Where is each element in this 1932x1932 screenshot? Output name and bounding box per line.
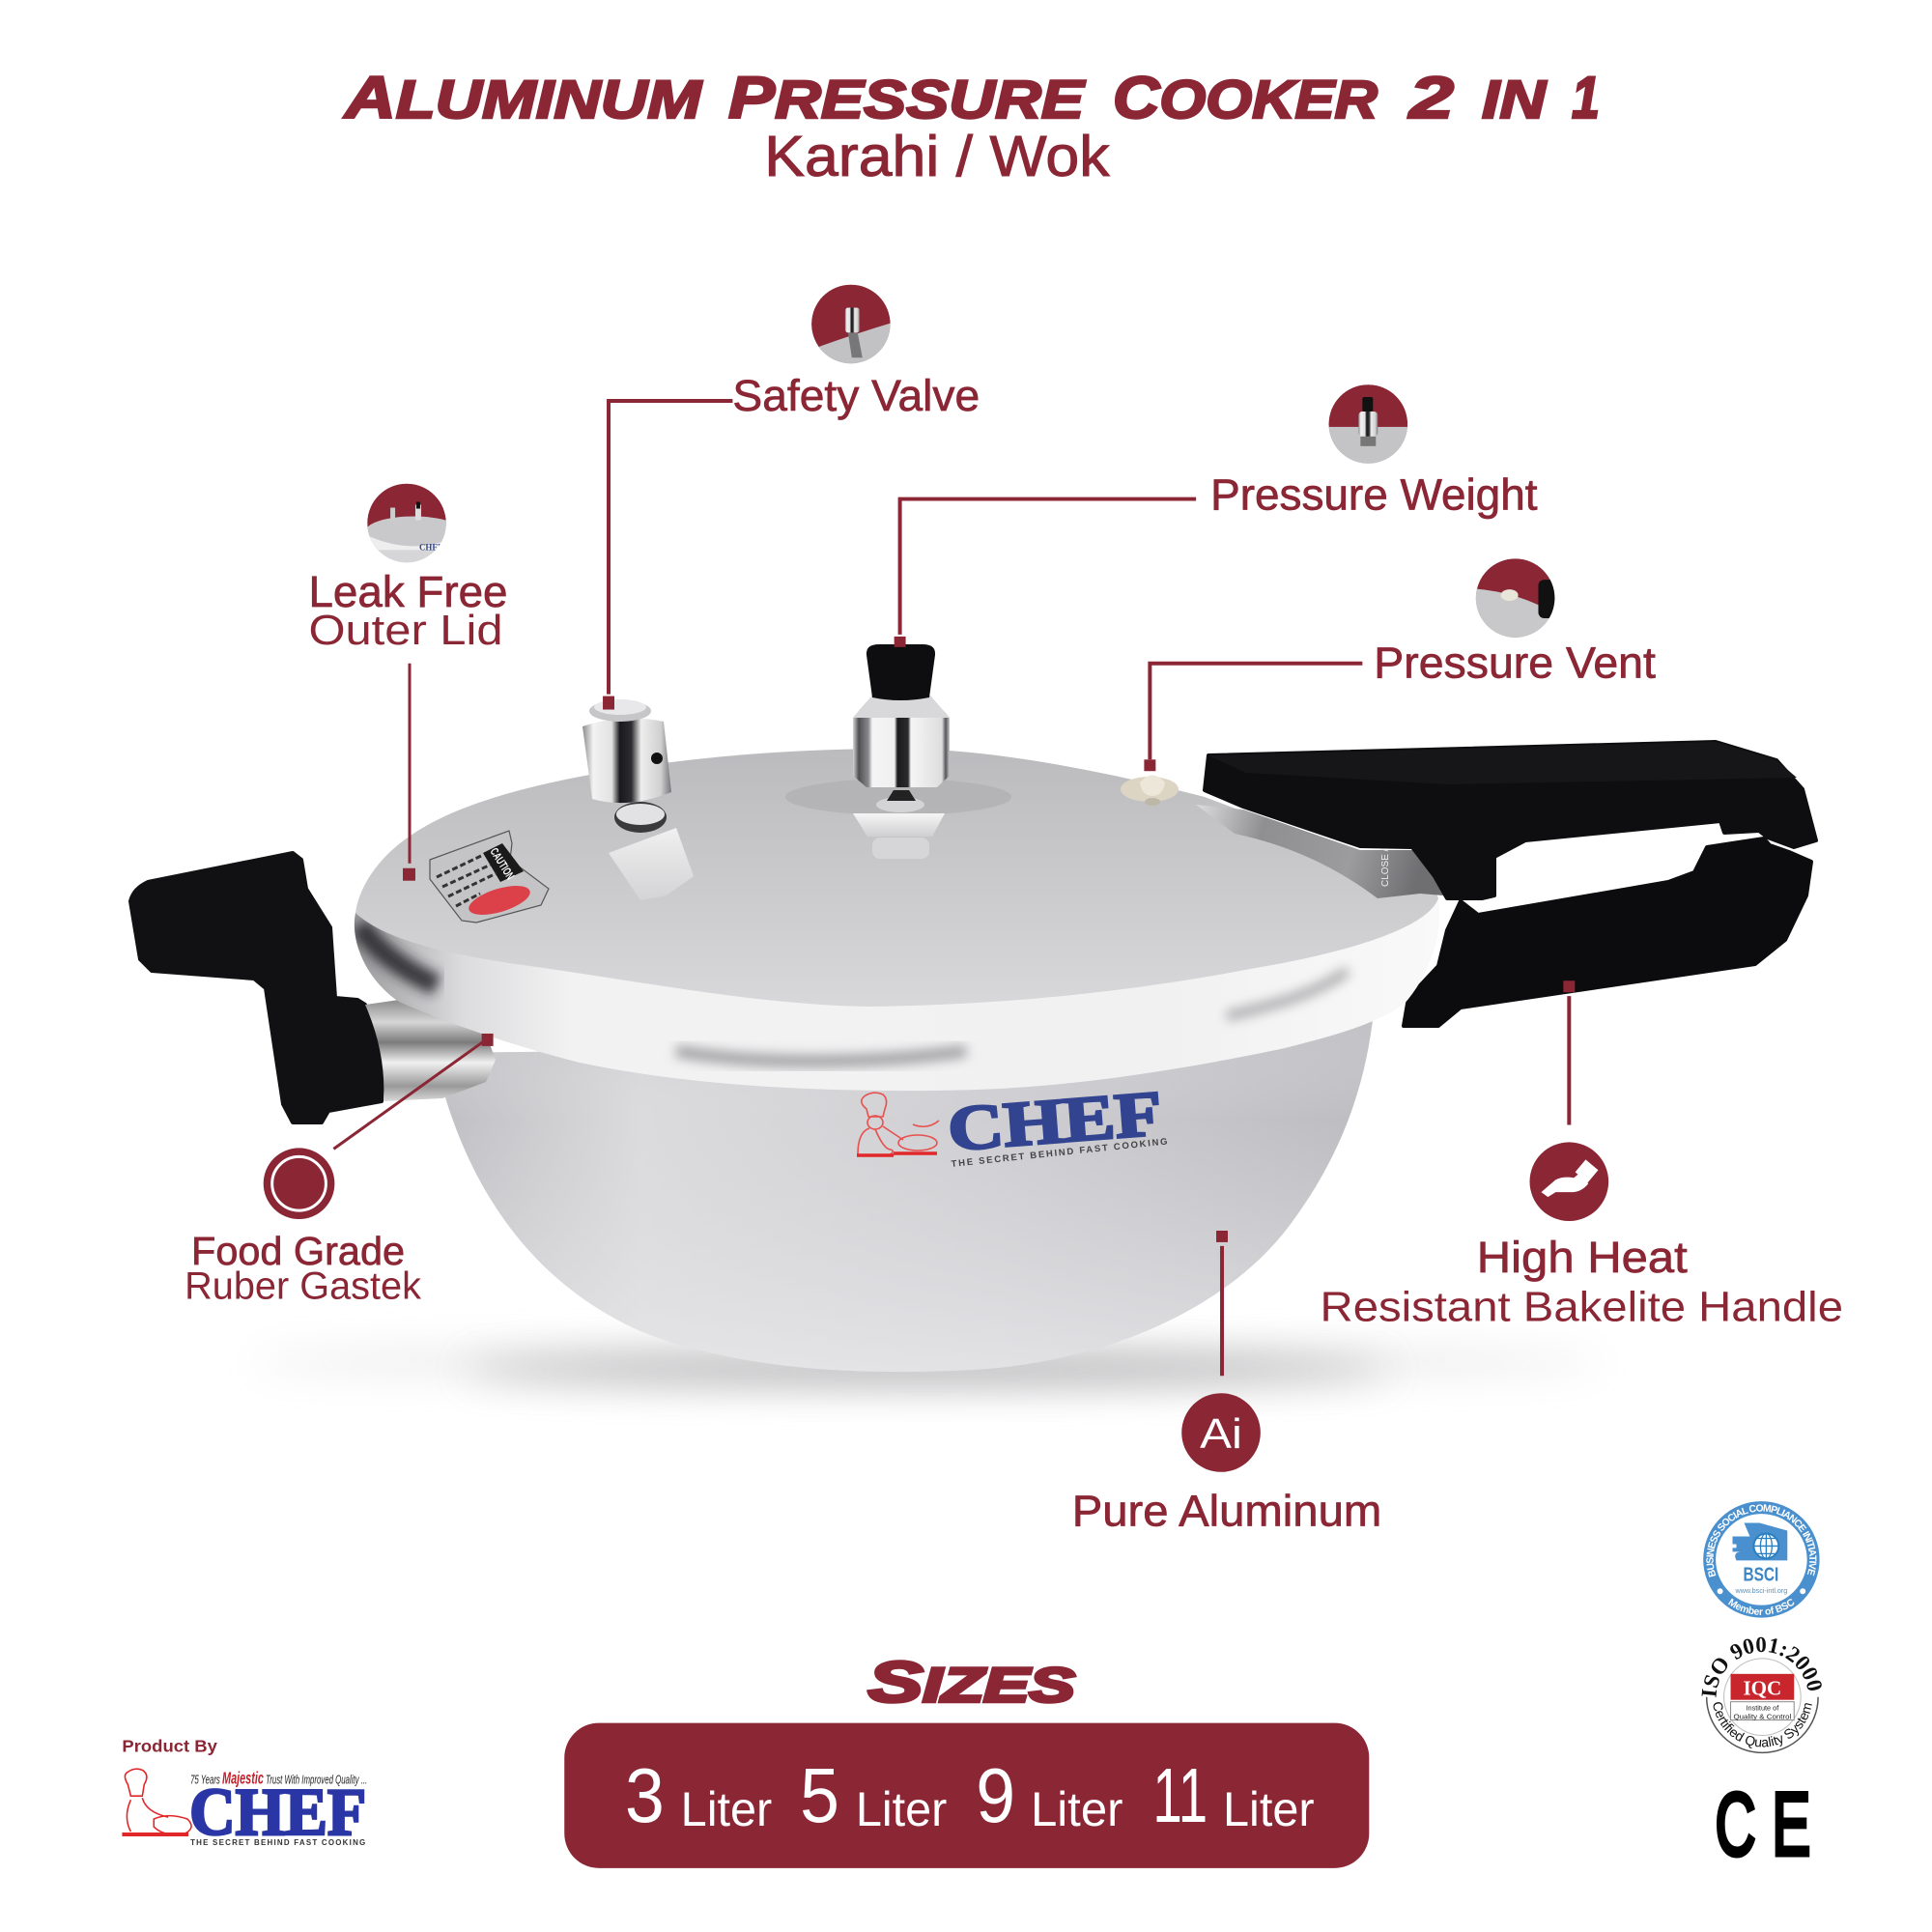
leader line: [900, 499, 1196, 635]
leader line: [333, 1039, 487, 1149]
callout: food grade rubber gasket: [185, 1034, 494, 1308]
title: [343, 65, 1600, 130]
label: Safety Valve: [732, 371, 980, 420]
safety valve: [582, 699, 671, 833]
size 5 liter: 5: [800, 1752, 839, 1838]
title: PRESSURE: [728, 65, 1086, 130]
leader line: [1150, 664, 1362, 759]
icon: safety valve: [811, 284, 891, 363]
marker: [482, 1034, 494, 1046]
BSCI badge: BUSINESS SOCIAL COMPLIANCE INITIATIVE: [1706, 1504, 1816, 1577]
title: COOKER: [1113, 65, 1378, 130]
icon: pressure weight: [1329, 384, 1408, 464]
pressure weight reflection: [853, 813, 945, 859]
subtitle: Karahi / Wok: [764, 124, 1110, 188]
label: High Heat: [1477, 1233, 1688, 1282]
icon: ring: [264, 1148, 334, 1219]
size 9 liter: 9: [976, 1752, 1015, 1838]
label: Food Grade: [191, 1229, 405, 1273]
label: Pressure Vent: [1374, 639, 1656, 688]
icon: hand: [1530, 1142, 1608, 1221]
label: Pressure Weight: [1210, 470, 1538, 520]
ISO certification badge: Certified Quality System: [1714, 1702, 1812, 1748]
BSCI badge: BSCI: [1743, 1564, 1778, 1585]
marker: [1563, 980, 1575, 992]
size 5 liter: [800, 1752, 947, 1838]
BSCI badge: www.bsci-intl.org: [1735, 1586, 1787, 1595]
size 11 liter: Liter: [1223, 1782, 1315, 1836]
caution label: [430, 831, 549, 923]
chef figure: [122, 1769, 191, 1834]
callout: leak free outer lid: [308, 484, 508, 881]
callout: high heat handle: [1321, 980, 1843, 1331]
BSCI badge: [1703, 1501, 1820, 1618]
label: Leak Free: [308, 567, 508, 616]
marker: [895, 637, 906, 647]
label: Pure Aluminum: [1072, 1487, 1381, 1536]
left handle: [130, 853, 384, 1122]
size 5 liter: Liter: [856, 1782, 947, 1836]
marker: [403, 868, 415, 881]
callout: safety valve: [603, 285, 980, 710]
icon: Ai: Ai: [1200, 1410, 1242, 1458]
icon: pressure vent: [1476, 558, 1555, 638]
pot body: [434, 1011, 1374, 1372]
title: IN: [1482, 69, 1548, 129]
BSCI badge: Member of BSCI: [1728, 1598, 1795, 1615]
ISO certification badge: ISO 9001:2000: [1702, 1636, 1822, 1697]
label second line: Resistant Bakelite Handle: [1321, 1284, 1843, 1331]
leader line: [1567, 996, 1571, 1125]
lid dome: [355, 749, 1438, 1007]
CHEF logo on pot: THE SECRET BEHIND FAST COOKING: [951, 1137, 1168, 1170]
CHEF logo on pot: CHEF: [946, 1078, 1164, 1165]
CE mark: E: [1772, 1776, 1810, 1874]
callout: pressure vent: [1144, 558, 1656, 771]
cooker shadow: [251, 1347, 1604, 1385]
ISO certification badge: Quality & Control: [1734, 1713, 1792, 1721]
lid rim: [355, 898, 1439, 1091]
product by brand block: [122, 1736, 367, 1850]
close open engraving: CLOSE / OPEN: [1380, 818, 1391, 887]
safety valve reflection: [609, 828, 694, 900]
size 3 liter: [625, 1752, 772, 1838]
leader line: [609, 401, 732, 695]
label second line: Ruber Gastek: [185, 1265, 421, 1308]
size 3 liter: Liter: [681, 1782, 772, 1836]
callout: pressure weight: [895, 384, 1538, 647]
marker: [1144, 759, 1155, 771]
size 9 liter: Liter: [1031, 1782, 1123, 1836]
tagline: THE SECRET BEHIND FAST COOKING: [190, 1838, 365, 1847]
right upper handle: [1205, 742, 1816, 898]
sizes panel: [564, 1723, 1369, 1868]
CHEF wordmark: CHEF: [189, 1776, 366, 1850]
75 years majestic line: 75 Years Majestic Trust With Improved Quality ...: [190, 1768, 367, 1787]
handle connector: [365, 1000, 496, 1101]
CE mark: C: [1716, 1776, 1755, 1874]
marker: [1216, 1231, 1228, 1242]
icon: lid: [367, 483, 446, 562]
size 3 liter: 3: [625, 1752, 665, 1838]
pressure weight: [853, 644, 950, 812]
chef figure on pot: [857, 1093, 939, 1156]
panel background: [564, 1723, 1369, 1868]
annotations and footer: [122, 133, 1841, 1868]
label second line: Outer Lid: [308, 607, 503, 654]
lid central recess: [785, 779, 1011, 815]
handle top facet: [1208, 742, 1797, 784]
right lower handle: [1404, 838, 1811, 1026]
icon: lid: CHEF: [419, 542, 443, 552]
sizes heading: S IZES: [868, 1650, 1075, 1715]
leader line: [1220, 1246, 1224, 1376]
icon: Ai: [1181, 1393, 1261, 1472]
title: ALUMINUM: [343, 65, 703, 130]
size 9 liter: [976, 1752, 1123, 1838]
leader line: [408, 664, 411, 864]
product photo: pressure cooker: [130, 644, 1816, 1372]
size 11 liter: 11: [1152, 1752, 1208, 1838]
ISO certification badge: Institute of: [1746, 1704, 1779, 1713]
title: 2: [1408, 65, 1454, 130]
pressure vent: [1121, 775, 1179, 806]
title: 1: [1572, 65, 1600, 130]
product by text: Product By: [122, 1736, 217, 1755]
ISO certification badge: [1702, 1636, 1822, 1754]
ISO certification badge: IQC: [1743, 1677, 1781, 1700]
caution label: CAUTION: [487, 845, 517, 882]
callout: pure aluminum: [1072, 1231, 1381, 1536]
steel handle bracket: [1196, 805, 1443, 898]
marker: [603, 696, 614, 710]
CE mark: [1716, 1776, 1810, 1874]
size 11 liter: [1152, 1752, 1315, 1838]
